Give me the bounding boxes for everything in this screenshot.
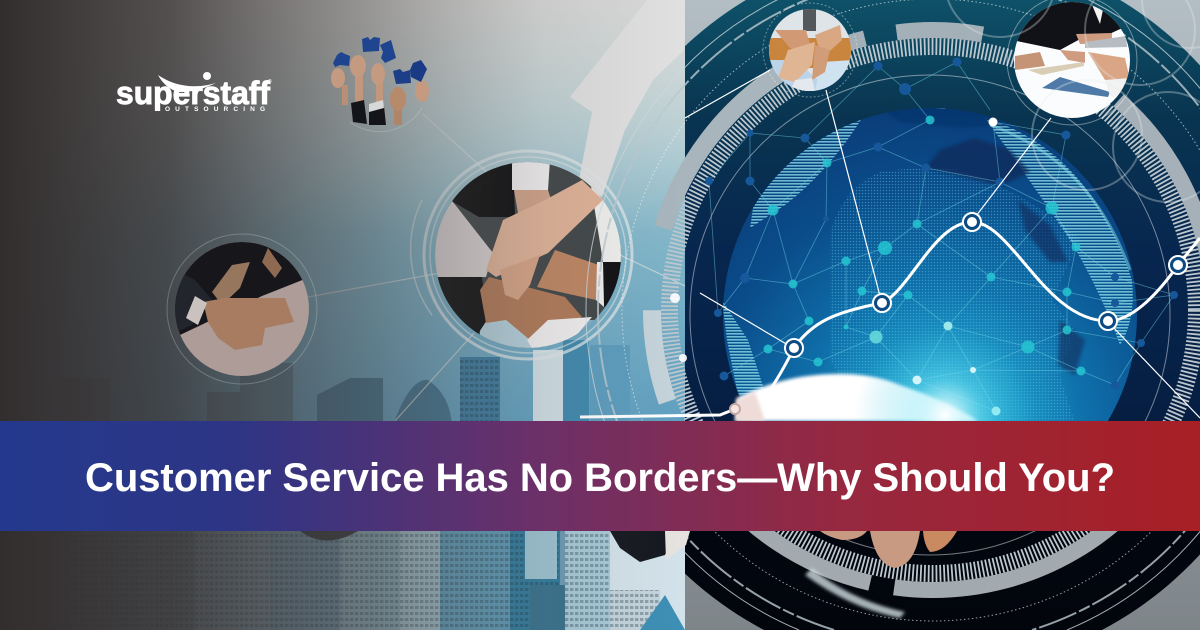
- photo circle: puzzle hands: [331, 37, 429, 132]
- logo: SuperStaff Outsourcing: ®: [268, 78, 272, 85]
- hub: dark disc and rings: [571, 0, 1200, 630]
- banner title: Customer Service Has No Borders—Why Should You?: [85, 456, 1115, 500]
- banner: [0, 421, 1200, 531]
- connector lines left: [308, 113, 700, 421]
- photo circle: meeting with documents: [1007, 0, 1137, 125]
- photo circle: handshake: [167, 234, 317, 384]
- network lines: [709, 62, 1174, 411]
- line chart: [580, 213, 1200, 417]
- network nodes: [670, 58, 1178, 416]
- city skyline: [0, 340, 800, 630]
- large white arc upper centre: [570, 0, 688, 197]
- left dark gradient overlay: [0, 0, 680, 630]
- connector lines to chart: [685, 70, 1200, 418]
- land: dotted continents: [830, 168, 1080, 440]
- photo circle: team hands on desk: [763, 3, 857, 97]
- blurred streak at hub bottom: [805, 568, 905, 618]
- top haze: [0, 0, 685, 420]
- grey field behind hub at right: [685, 0, 1200, 630]
- photo circle: joined hands: [411, 151, 632, 360]
- logo: SuperStaff Outsourcing: superstaff: [116, 75, 270, 111]
- globe: [723, 108, 1137, 421]
- ocean: dark patches: [925, 138, 1030, 186]
- hand under globe: [735, 325, 1035, 505]
- lower hand and cuff below band: [300, 531, 957, 568]
- geometric line art upper right: [945, 0, 1200, 202]
- logo: SuperStaff Outsourcing: OUTSOURCING: [165, 106, 265, 113]
